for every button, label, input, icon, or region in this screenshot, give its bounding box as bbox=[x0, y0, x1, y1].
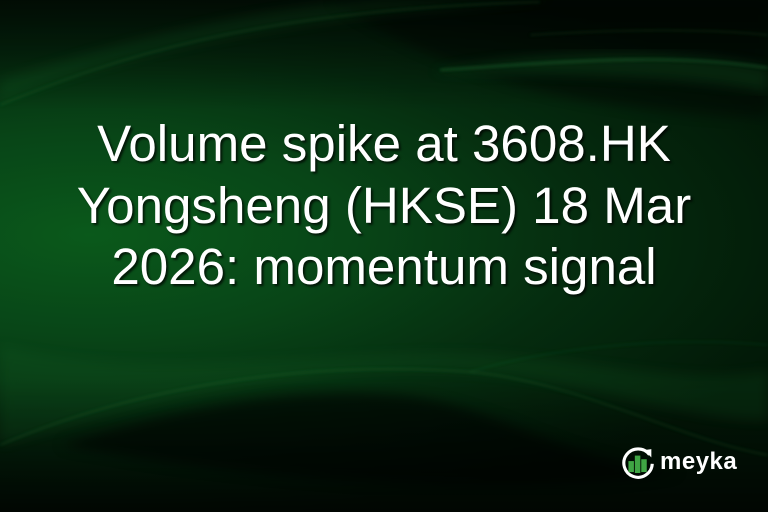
logo: meyka bbox=[622, 447, 737, 479]
light swoosh top bbox=[0, 0, 560, 100]
light swoosh bottom bbox=[0, 345, 768, 445]
brand name: meyka bbox=[660, 448, 737, 475]
title: 2026: momentum signal bbox=[111, 238, 657, 295]
title bbox=[77, 115, 693, 297]
dark swoosh top right bbox=[330, 0, 768, 118]
dark swoosh bottom bbox=[60, 393, 680, 485]
title: Yongsheng (HKSE) 18 Mar bbox=[77, 176, 691, 234]
title: Volume spike at 3608.HK bbox=[97, 115, 671, 172]
icon: ring with green bars bbox=[622, 447, 654, 479]
